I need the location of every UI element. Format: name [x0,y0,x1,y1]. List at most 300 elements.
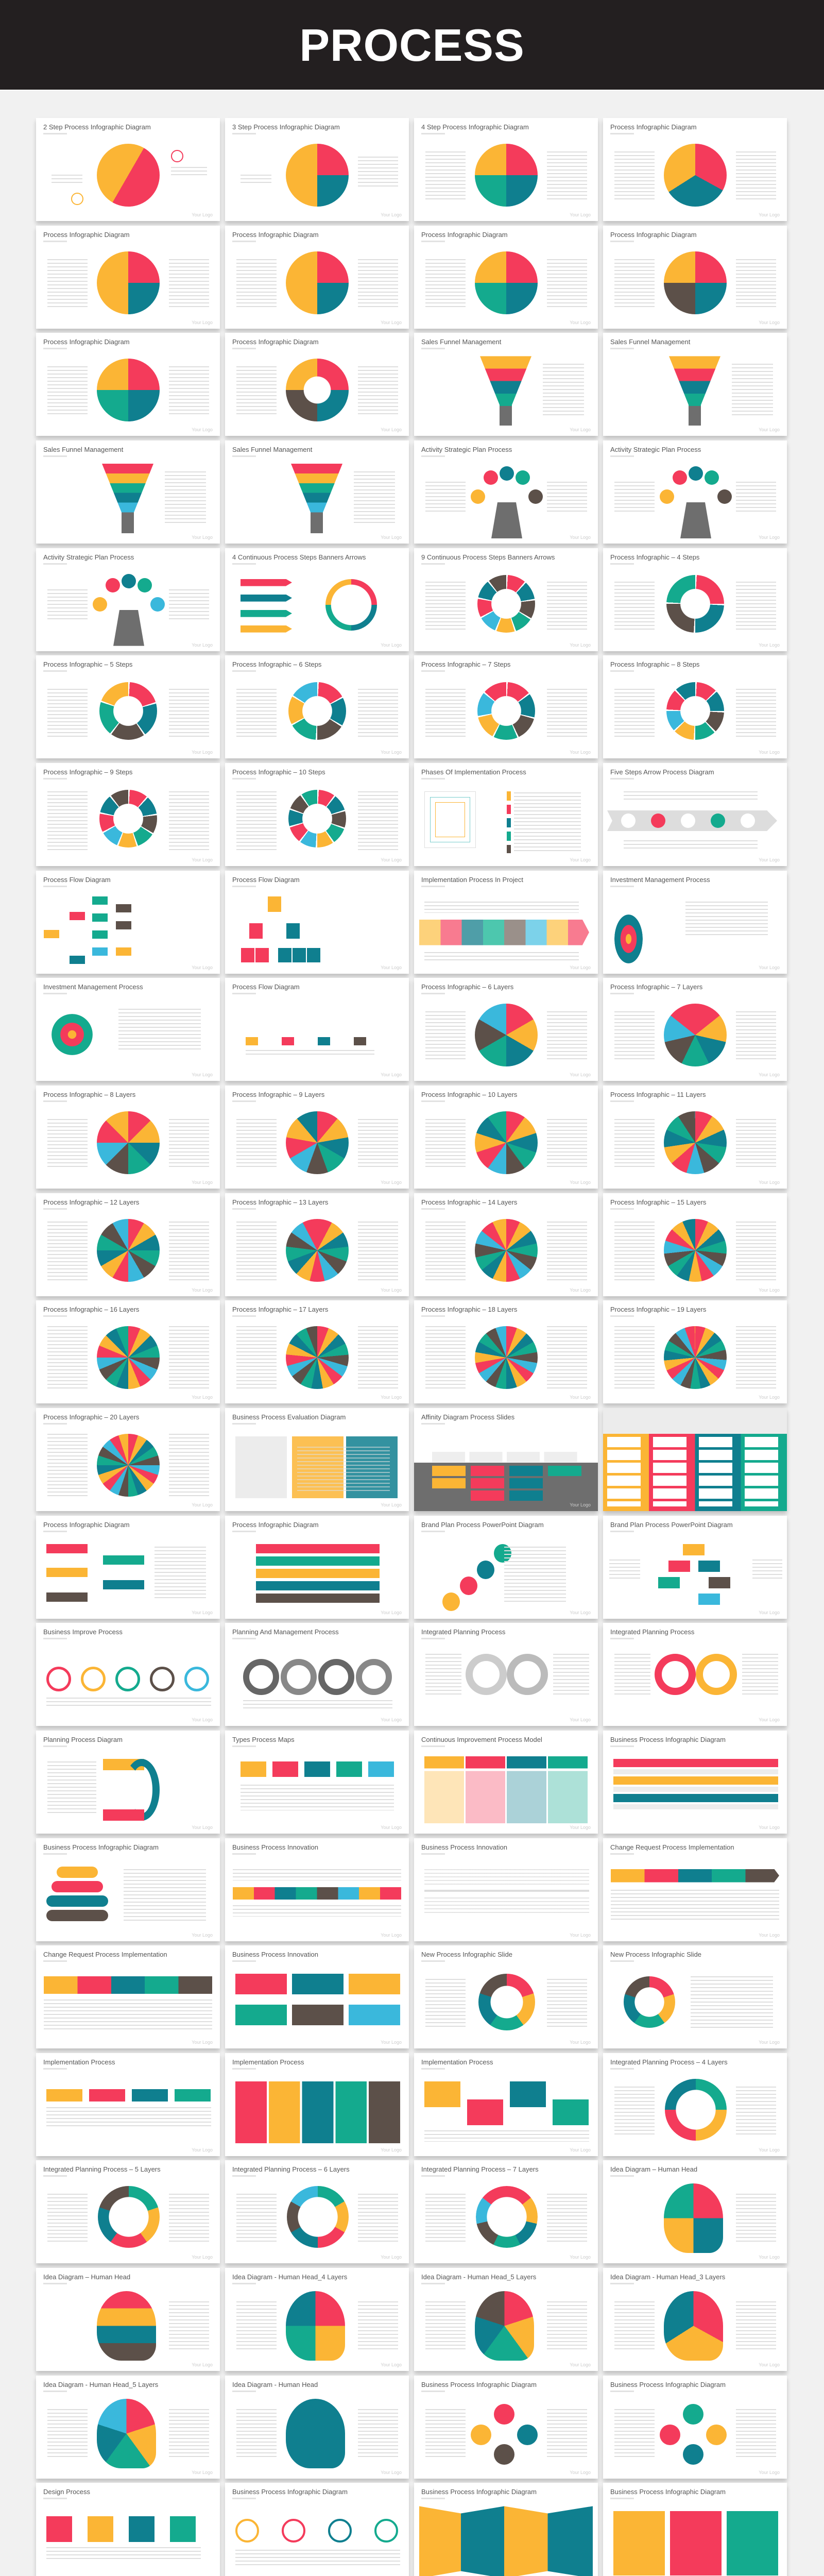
text [611,1890,779,1921]
card 72: Your Logo [759,2040,780,2045]
text [169,366,209,415]
card 68 [603,1838,787,1941]
card 39: Your Logo [570,1180,591,1185]
card 77: Your Logo [192,2255,213,2260]
text [233,1869,401,1880]
card 14: Sales Funnel Management [232,446,312,453]
cards [613,2511,778,2575]
text [547,482,587,513]
card 11: Your Logo [570,427,591,432]
text [609,1560,640,1580]
text [736,259,776,308]
card 3 [414,118,598,221]
text [736,2087,776,2136]
card 20 [603,548,787,651]
layered pie [286,1326,349,1389]
gray band [414,1463,598,1511]
layered pie [97,1111,160,1174]
evaluation table [235,1436,398,1498]
card 17: Activity Strategic Plan Process [43,553,134,561]
text [46,1698,211,1708]
card 22: Your Logo [381,750,402,755]
arrow ring [476,2186,538,2248]
card 57 [36,1623,220,1726]
text [236,259,277,308]
card 13: Your Logo [192,535,213,540]
card 56: Brand Plan Process PowerPoint Diagram [610,1521,733,1529]
card 64: Business Process Infographic Diagram [610,1736,726,1743]
card 48: Process Infographic – 19 Layers [610,1306,706,1313]
card 28: Your Logo [759,857,780,862]
text [169,1119,209,1168]
stacked bars [613,1759,778,1818]
text [169,259,209,308]
card 62 [225,1731,409,1834]
list rows [256,1544,380,1603]
text [547,2409,587,2458]
card 92 [603,2483,787,2576]
card 81: Idea Diagram – Human Head [43,2273,130,2281]
card 88 [603,2376,787,2479]
text [425,1011,466,1060]
card 63: Your Logo [570,1825,591,1830]
title: PROCESS [299,20,525,71]
card 16: Your Logo [759,535,780,540]
card 41: Your Logo [192,1287,213,1293]
card 59: Integrated Planning Process [421,1628,505,1636]
card 57: Your Logo [192,1717,213,1722]
text [169,689,209,738]
card 24: Process Infographic – 8 Steps [610,660,699,668]
text [736,1119,776,1168]
text [547,1326,587,1391]
tree boxes [658,1544,730,1605]
card 83: Idea Diagram - Human Head_5 Layers [421,2273,536,2281]
card 89: Design Process [43,2488,90,2496]
text [235,2550,400,2565]
text [425,482,466,513]
card 78 [225,2160,409,2263]
ring [99,790,157,848]
text [736,151,776,200]
card 10 [225,333,409,436]
layered pie [664,1004,727,1066]
text [547,582,587,631]
card 63 [414,1731,598,1834]
card 46: Process Infographic – 17 Layers [232,1306,328,1313]
card 65: Your Logo [192,1932,213,1937]
card 51: Your Logo [570,1502,591,1507]
card 58: Your Logo [381,1717,402,1722]
card 18: Your Logo [381,642,402,648]
card 35 [414,978,598,1081]
text [358,2409,398,2458]
boxes [424,2081,589,2143]
card 76: Integrated Planning Process – 4 Layers [610,2058,728,2066]
step boxes [46,2089,211,2130]
card 41 [36,1193,220,1296]
card 55: Your Logo [570,1610,591,1615]
text [614,2087,655,2136]
card 76 [603,2053,787,2156]
ring icon [171,150,183,162]
card 19: 9 Continuous Process Steps Banners Arrows [421,553,555,561]
card 45: Your Logo [192,1395,213,1400]
card 57: Business Improve Process [43,1628,123,1636]
layered pie [97,1326,160,1389]
text [118,1009,201,1050]
card 76: Your Logo [759,2147,780,2153]
card 19 [414,548,598,651]
circle chain [442,1544,511,1611]
text [47,791,88,851]
card 77 [36,2160,220,2263]
step icons row [246,1037,374,1055]
card 30 [225,871,409,974]
arrow ring [287,2186,349,2248]
card 32: Your Logo [759,965,780,970]
card 68: Change Request Process Implementation [610,1843,734,1851]
map boxes [241,1761,395,1813]
card 26 [225,763,409,866]
card 3: Your Logo [570,212,591,217]
card 17: Your Logo [192,642,213,648]
text [752,1560,782,1580]
text right [358,157,398,188]
text [543,364,584,415]
layered pie [664,1219,727,1282]
card 9 [36,333,220,436]
head [664,2183,723,2253]
text [425,1326,466,1391]
text [547,689,587,738]
funnel [291,464,342,533]
head [286,2291,345,2361]
ring [666,575,724,633]
text [47,366,88,415]
text [547,151,587,200]
card 2: 3 Step Process Infographic Diagram [232,123,340,131]
pie diagram [664,251,727,314]
card 43: Your Logo [570,1287,591,1293]
card 71: Your Logo [570,2040,591,2045]
card 38: Your Logo [381,1180,402,1185]
card 49: Your Logo [192,1502,213,1507]
card 89 [36,2483,220,2576]
text [236,1119,277,1168]
card 37 [36,1086,220,1189]
text [424,952,579,962]
chevron row [611,1869,779,1883]
card 11: Sales Funnel Management [421,338,501,346]
card 42 [225,1193,409,1296]
layered pie [475,1219,538,1282]
text [685,902,768,938]
text [358,791,398,851]
step circles [621,814,755,828]
card 53: Process Infographic Diagram [43,1521,130,1529]
text [614,2409,655,2458]
card 69 [36,1945,220,2048]
card 80: Your Logo [759,2255,780,2260]
card 13 [36,440,220,544]
card 11 [414,333,598,436]
card 41: Process Infographic – 12 Layers [43,1198,139,1206]
card 21 [36,655,220,758]
arrow ring [98,2186,160,2248]
text [236,1222,277,1281]
text [47,1222,88,1281]
card 73: Your Logo [192,2147,213,2153]
card 72: New Process Infographic Slide [610,1951,701,1958]
ring row [46,1667,209,1691]
card 70: Your Logo [381,2040,402,2045]
card 87: Your Logo [570,2470,591,2475]
card 48 [603,1300,787,1403]
pie diagram [97,144,160,207]
pie diagram [475,251,538,314]
card 22 [225,655,409,758]
head [97,2291,156,2361]
text [236,2409,277,2458]
text [47,2409,88,2458]
card 42: Your Logo [381,1287,402,1293]
text [614,582,655,631]
text [691,1976,773,2028]
card 23 [414,655,598,758]
card 47: Process Infographic – 18 Layers [421,1306,517,1313]
header strip [603,1408,787,1434]
list rows [46,1544,206,1602]
text [358,2194,398,2243]
white cells [607,1437,785,1506]
card 16 [603,440,787,544]
text [358,1222,398,1281]
card 46 [225,1300,409,1403]
text [425,2194,466,2243]
card 33: Your Logo [192,1072,213,1077]
big arrows [419,2506,593,2576]
card 1: Your Logo [192,212,213,217]
boxes [235,1974,400,2036]
text [736,2301,776,2350]
text [614,259,655,308]
arrow ring [665,2079,727,2141]
text [614,2301,655,2350]
U arrows [103,1759,160,1821]
layered pie [664,1111,727,1174]
text [47,1761,96,1813]
text [169,589,209,620]
card 66: Business Process Innovation [232,1843,318,1851]
card 67: Business Process Innovation [421,1843,507,1851]
card 44: Your Logo [759,1287,780,1293]
card 61: Your Logo [192,1825,213,1830]
card 55 [414,1516,598,1619]
card 70 [225,1945,409,2048]
card 17 [36,548,220,651]
card 8 [603,226,787,329]
funnel [102,464,153,533]
text [553,1654,589,1695]
text [236,2301,277,2350]
card 3: 4 Step Process Infographic Diagram [421,123,529,131]
card 20: Your Logo [759,642,780,648]
card 18 [225,548,409,651]
card 72 [603,1945,787,2048]
card 7: Your Logo [570,320,591,325]
card 21: Your Logo [192,750,213,755]
card 75: Your Logo [570,2147,591,2153]
head [475,2291,534,2361]
card 12: Sales Funnel Management [610,338,690,346]
card 25 [36,763,220,866]
card 37: Process Infographic – 8 Layers [43,1091,135,1098]
text left [241,175,271,185]
card 61: Planning Process Diagram [43,1736,123,1743]
target [52,1014,93,1055]
layered pie [97,1219,160,1282]
stand [680,502,711,538]
text [732,364,773,415]
card 26: Process Infographic – 10 Steps [232,768,325,776]
text [165,471,206,523]
org boxes [241,896,320,962]
text [736,2194,776,2243]
card 47: Your Logo [570,1395,591,1400]
chevron boxes [44,1976,212,1994]
card 65: Business Process Infographic Diagram [43,1843,159,1851]
card 55: Brand Plan Process PowerPoint Diagram [421,1521,544,1529]
text [547,1011,587,1060]
card 44 [603,1193,787,1296]
card 39: Process Infographic – 10 Layers [421,1091,517,1098]
card 83: Your Logo [570,2362,591,2367]
ring [477,682,535,740]
card 68: Your Logo [759,1932,780,1937]
stand [113,610,144,646]
card 91: Business Process Infographic Diagram [421,2488,537,2496]
ring [99,682,157,740]
card 84: Idea Diagram - Human Head_3 Layers [610,2273,725,2281]
text [425,259,466,308]
text [547,1222,587,1281]
text [358,1119,398,1168]
card 66 [225,1838,409,1941]
text [614,482,655,513]
card 82 [225,2268,409,2371]
text [547,259,587,308]
text [425,2409,466,2458]
text [169,2301,209,2350]
layered pie [97,1434,160,1497]
text [736,1011,776,1060]
card 37: Your Logo [192,1180,213,1185]
card 35: Your Logo [570,1072,591,1077]
card 31: Your Logo [570,965,591,970]
layered pie [475,1326,538,1389]
card 4: Your Logo [759,212,780,217]
infinity rings [466,1654,548,1695]
card 1: 2 Step Process Infographic Diagram [43,123,151,131]
card 67 [414,1838,598,1941]
head [286,2399,345,2468]
card 43 [414,1193,598,1296]
card 43: Process Infographic – 14 Layers [421,1198,517,1206]
card 38: Process Infographic – 9 Layers [232,1091,324,1098]
card 14: Your Logo [381,535,402,540]
ring chain [243,1659,392,1695]
text [358,689,398,738]
pie diagram [286,251,349,314]
card 45 [36,1300,220,1403]
card 78: Integrated Planning Process – 6 Layers [232,2165,350,2173]
card 54 [225,1516,409,1619]
card 25: Your Logo [192,857,213,862]
card 28 [603,763,787,866]
card 71 [414,1945,598,2048]
text [424,1897,589,1912]
card 2: Your Logo [381,212,402,217]
step list [507,791,581,853]
card 60: Integrated Planning Process [610,1628,694,1636]
card 1 [36,118,220,221]
layered pie [475,1004,538,1066]
text [742,1654,778,1695]
card 71: New Process Infographic Slide [421,1951,512,1958]
card 74: Implementation Process [232,2058,304,2066]
card 6: Process Infographic Diagram [232,231,319,239]
pie diagram [664,144,727,207]
card 29: Process Flow Diagram [43,876,111,884]
ring [288,790,346,848]
card 2 [225,118,409,221]
text [47,1119,88,1168]
card 87: Business Process Infographic Diagram [421,2381,537,2388]
card 75: Implementation Process [421,2058,493,2066]
card 92: Business Process Infographic Diagram [610,2488,726,2496]
text [358,259,398,308]
text [169,1326,209,1391]
text [424,1869,589,1885]
ring icon [71,193,83,205]
card 13: Sales Funnel Management [43,446,123,453]
card 82: Idea Diagram - Human Head_4 Layers [232,2273,347,2281]
card 36: Your Logo [759,1072,780,1077]
card 36: Process Infographic – 7 Layers [610,983,702,991]
text [425,2301,466,2350]
text [425,1654,461,1695]
card 69: Your Logo [192,2040,213,2045]
card 77: Integrated Planning Process – 5 Layers [43,2165,161,2173]
circle cluster [471,2404,543,2466]
card 82: Your Logo [381,2362,402,2367]
card 50: Your Logo [381,1502,402,1507]
timeline line [424,1890,589,1892]
card 84 [603,2268,787,2371]
card 79 [414,2160,598,2263]
card 27: Your Logo [570,857,591,862]
text [736,1222,776,1281]
card 36 [603,978,787,1081]
card 34: Your Logo [381,1072,402,1077]
layered pie [475,1111,538,1174]
pie diagram [286,359,349,421]
text [547,2194,587,2243]
card 45: Process Infographic – 16 Layers [43,1306,139,1313]
card 26: Your Logo [381,857,402,862]
ring [477,575,535,633]
